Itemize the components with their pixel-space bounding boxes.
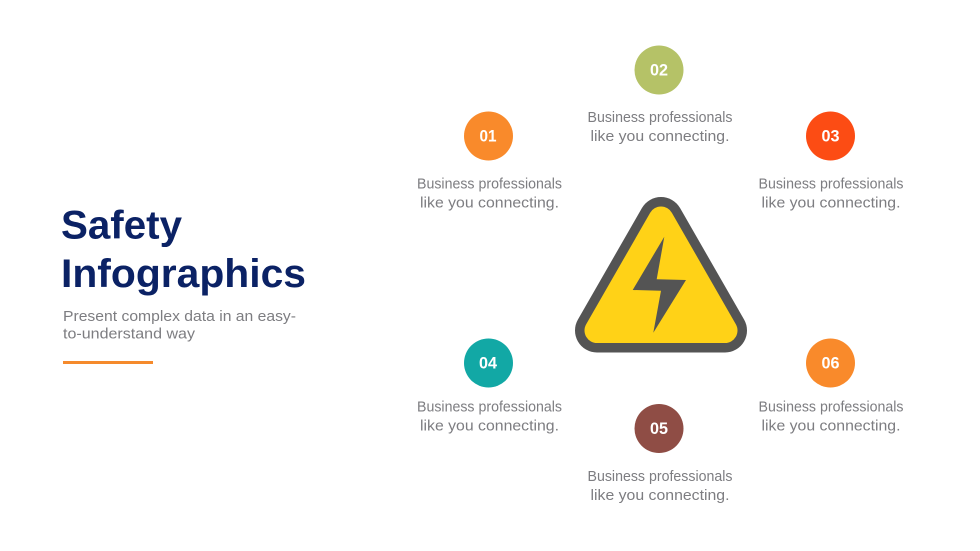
item 03 (758, 112, 904, 211)
item 04: 04 (479, 354, 498, 372)
item 02: 02 (650, 62, 668, 80)
item 05: Business professionals (588, 469, 732, 485)
accent underline (63, 361, 153, 364)
item 03: Business professionals (758, 176, 904, 192)
item 01: like you connecting. (420, 195, 559, 211)
item 02 (588, 46, 732, 145)
item 05: like you connecting. (590, 488, 730, 504)
title (61, 204, 306, 296)
item 02: like you connecting. (590, 129, 730, 145)
item 04 (417, 338, 562, 434)
item 06: 06 (822, 354, 840, 372)
title: Safety (61, 204, 183, 248)
item 06: Business professionals (758, 399, 904, 415)
item 01 (417, 112, 562, 211)
item 01: 01 (480, 128, 496, 146)
icon: warning triangle with lightning bolt (580, 202, 742, 348)
item 05 (588, 404, 732, 504)
subtitle: Present complex data in an easy- (63, 309, 296, 325)
title: Infographics (61, 252, 306, 296)
item 05: 05 (650, 420, 668, 438)
item 03: 03 (822, 128, 840, 146)
subtitle (63, 309, 296, 342)
item 01: Business professionals (417, 176, 562, 192)
item 04: Business professionals (417, 399, 562, 415)
subtitle: to-understand way (63, 326, 196, 342)
item 03: like you connecting. (762, 195, 900, 211)
item 06 (758, 338, 904, 434)
item 04: like you connecting. (420, 418, 559, 434)
item 06: like you connecting. (762, 418, 900, 434)
item 02: Business professionals (588, 110, 732, 126)
